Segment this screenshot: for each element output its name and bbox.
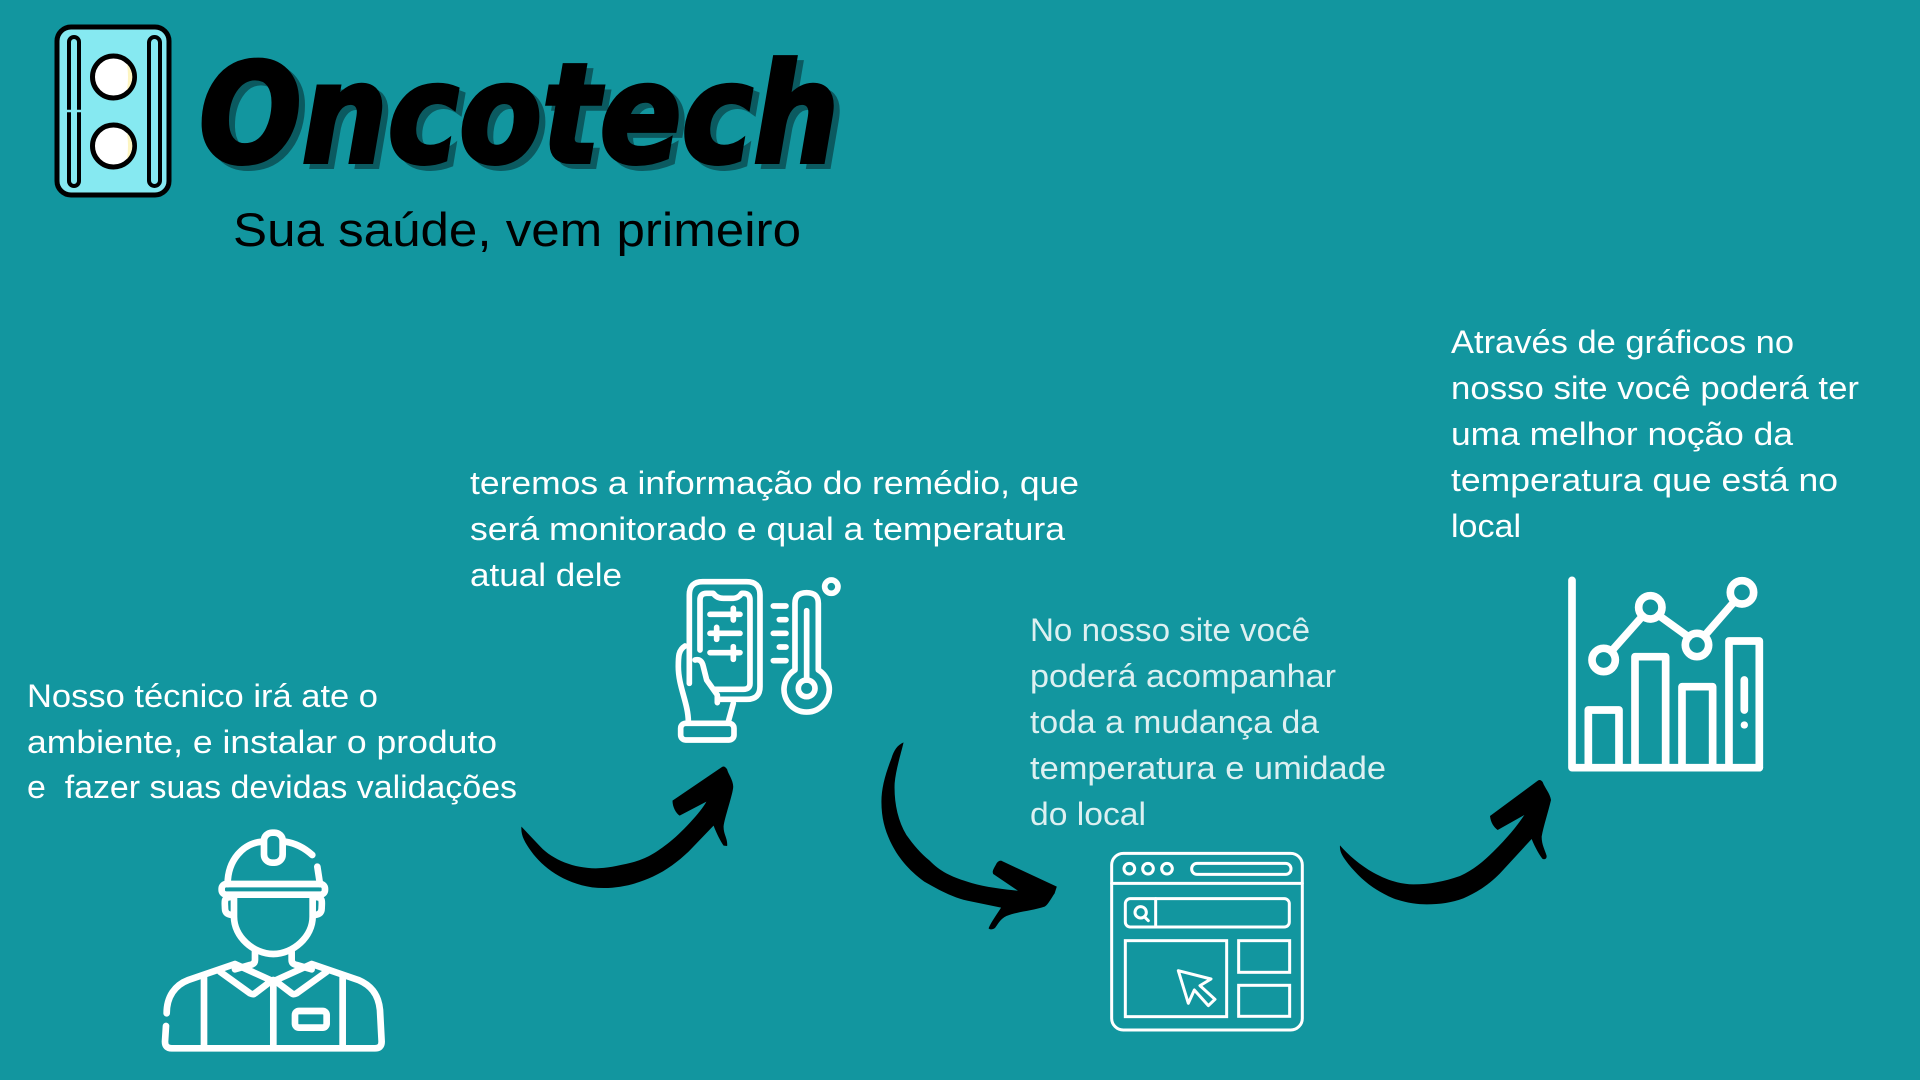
icon: technician with helmet xyxy=(165,833,382,1048)
text block: technician: e fazer suas devidas validações xyxy=(27,769,517,805)
text block: charts: local xyxy=(1451,508,1521,544)
text block: website tracking xyxy=(1030,612,1386,832)
icon: browser window xyxy=(1112,853,1302,1030)
text block: website tracking: poderá acompanhar xyxy=(1030,658,1336,694)
text block: charts: nosso site você poderá ter xyxy=(1451,370,1859,406)
subtitle: Sua saúde, vem primeiro xyxy=(233,203,801,256)
arrow: browser to chart xyxy=(1340,780,1551,904)
text block: medicine information: atual dele xyxy=(470,557,622,593)
text block: technician xyxy=(27,678,517,805)
logo: blister pack xyxy=(57,27,169,195)
text block: medicine information: será monitorado e qual a temperatura xyxy=(470,511,1065,547)
text block: website tracking: do local xyxy=(1030,796,1146,832)
text block: technician: ambiente, e instalar o produto xyxy=(27,724,497,760)
icon: phone and thermometer xyxy=(678,580,838,740)
text block: charts: temperatura que está no xyxy=(1451,462,1838,498)
title: Oncotech: Oncotech xyxy=(199,34,839,195)
text block: website tracking: toda a mudança da xyxy=(1030,704,1319,740)
text block: website tracking: No nosso site você xyxy=(1030,612,1310,648)
text block: charts: uma melhor noção da xyxy=(1451,416,1793,452)
title: Oncotech: Oncotech xyxy=(205,39,845,200)
text block: charts xyxy=(1451,324,1859,544)
icon: bar and line chart xyxy=(1572,580,1759,768)
text block: technician: Nosso técnico irá ate o xyxy=(27,678,378,714)
arrow: phone to browser xyxy=(881,742,1057,929)
text block: medicine information xyxy=(470,465,1079,593)
text block: website tracking: temperatura e umidade xyxy=(1030,750,1386,786)
text block: charts: Através de gráficos no xyxy=(1451,324,1794,360)
arrow: technician to phone xyxy=(521,767,733,888)
text block: medicine information: teremos a informação do remédio, que xyxy=(470,465,1079,501)
